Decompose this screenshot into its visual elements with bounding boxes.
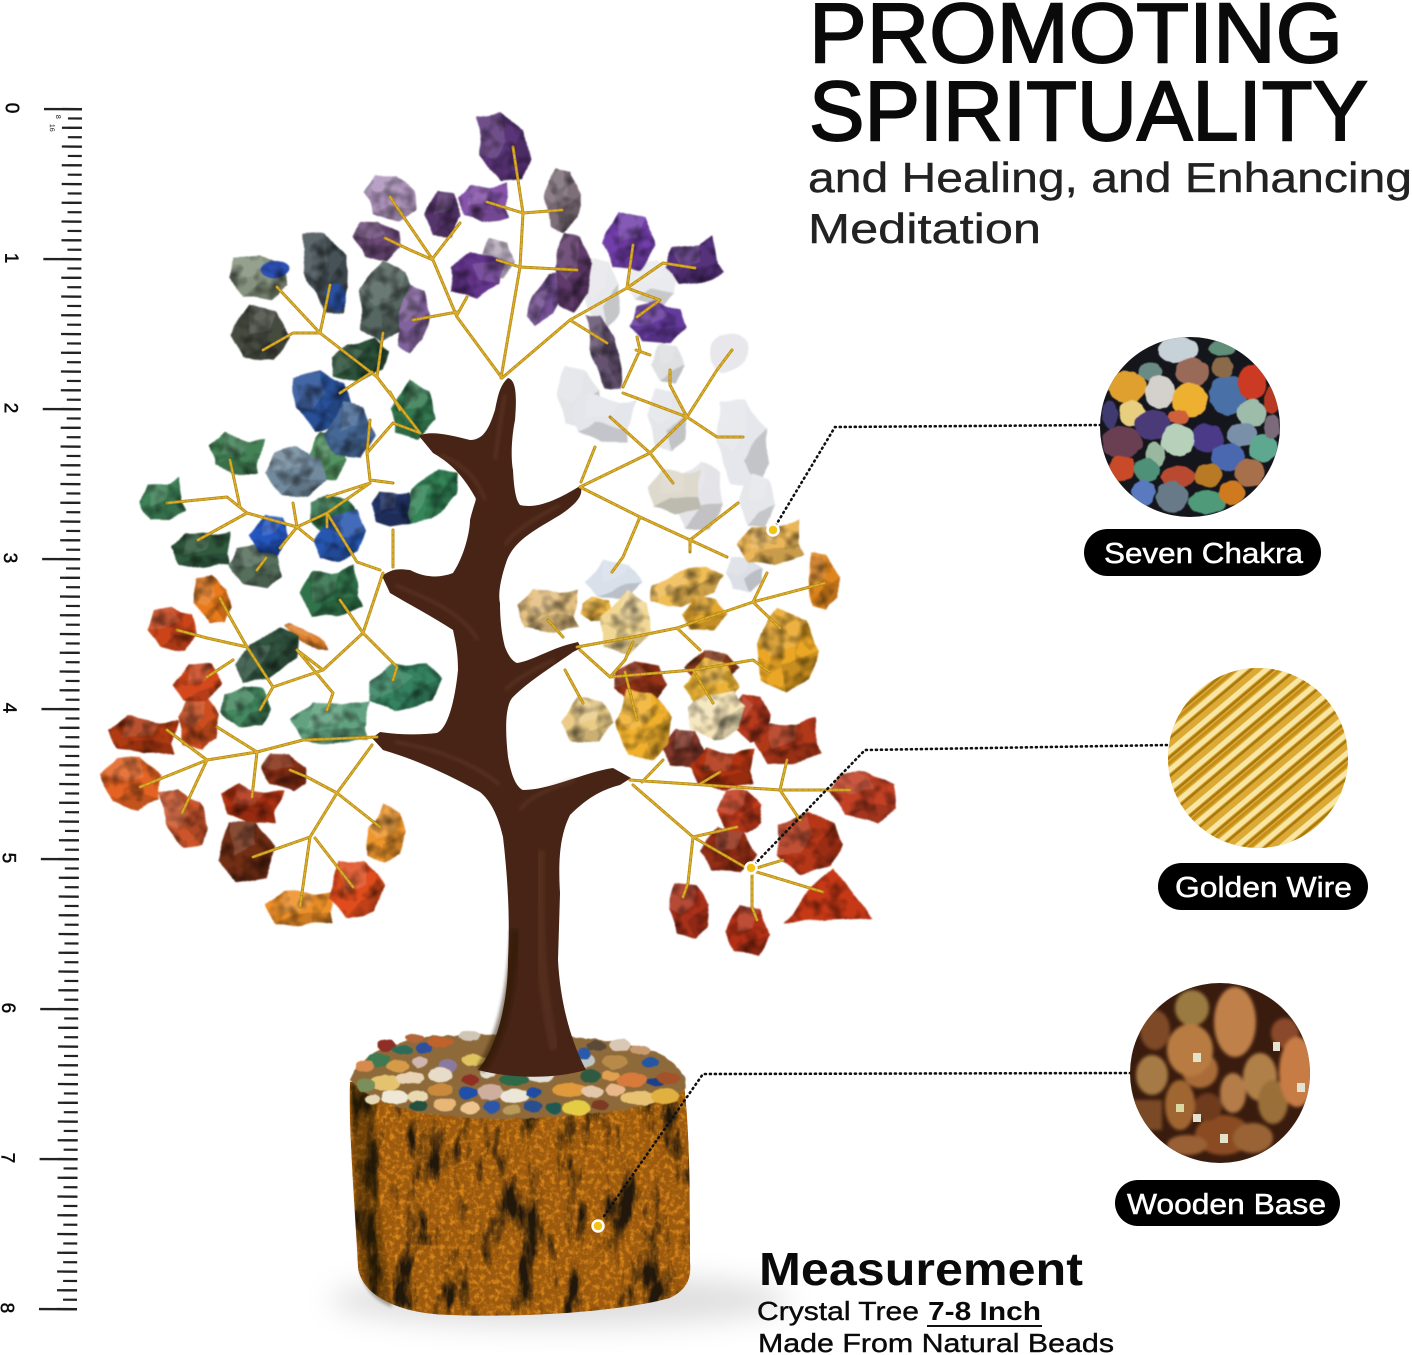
- title: [809, 0, 1368, 158]
- measurement block: Measurement: [759, 1243, 1083, 1295]
- ruler: 1: [0, 253, 21, 263]
- wooden base: [350, 1031, 690, 1316]
- measurement block: 7-8 Inch: [928, 1296, 1041, 1326]
- ruler: 16: [48, 124, 55, 132]
- gemstones: clear quartz: [557, 252, 776, 598]
- tree trunk: [372, 378, 631, 1077]
- gemstones: green and lapis: [135, 226, 469, 745]
- base shadow: [330, 1274, 790, 1326]
- callout line: golden wire: [746, 745, 1168, 874]
- measurement block: [757, 1243, 1114, 1355]
- subtitle: and Healing, and Enhancing: [808, 154, 1412, 201]
- ruler: [0, 103, 75, 1314]
- label: wooden base: Wooden Base: [1127, 1189, 1326, 1221]
- callout line: seven chakra: [768, 425, 1100, 536]
- tree wires: [140, 147, 850, 920]
- dot: wooden base callout: [592, 1220, 604, 1232]
- gemstones: yellow: [517, 518, 838, 743]
- label: wooden base: [1115, 1180, 1340, 1226]
- gemstones: carnelian left: [93, 571, 413, 926]
- label: golden wire: Golden Wire: [1175, 872, 1352, 904]
- gemstones: amethyst: [348, 106, 726, 393]
- photo: golden wire: [1168, 668, 1348, 848]
- subtitle: Meditation: [808, 205, 1041, 252]
- gemstones: carnelian right: [612, 651, 905, 955]
- ruler: 8: [54, 115, 61, 119]
- label: seven chakra: Seven Chakra: [1104, 538, 1304, 570]
- label: seven chakra: [1084, 529, 1321, 576]
- pebble top: [350, 1031, 686, 1119]
- ruler: 0: [1, 103, 22, 113]
- label: golden wire: [1158, 863, 1368, 910]
- ruler: 2: [0, 403, 21, 413]
- measurement block: Crystal Tree: [757, 1296, 919, 1326]
- callout line: wooden base: [604, 1073, 1130, 1216]
- title: SPIRITUALITY: [809, 64, 1368, 158]
- subtitle: [808, 154, 1412, 252]
- photo: seven chakra stones: [1100, 337, 1280, 517]
- photo: wooden logs: [1130, 983, 1315, 1163]
